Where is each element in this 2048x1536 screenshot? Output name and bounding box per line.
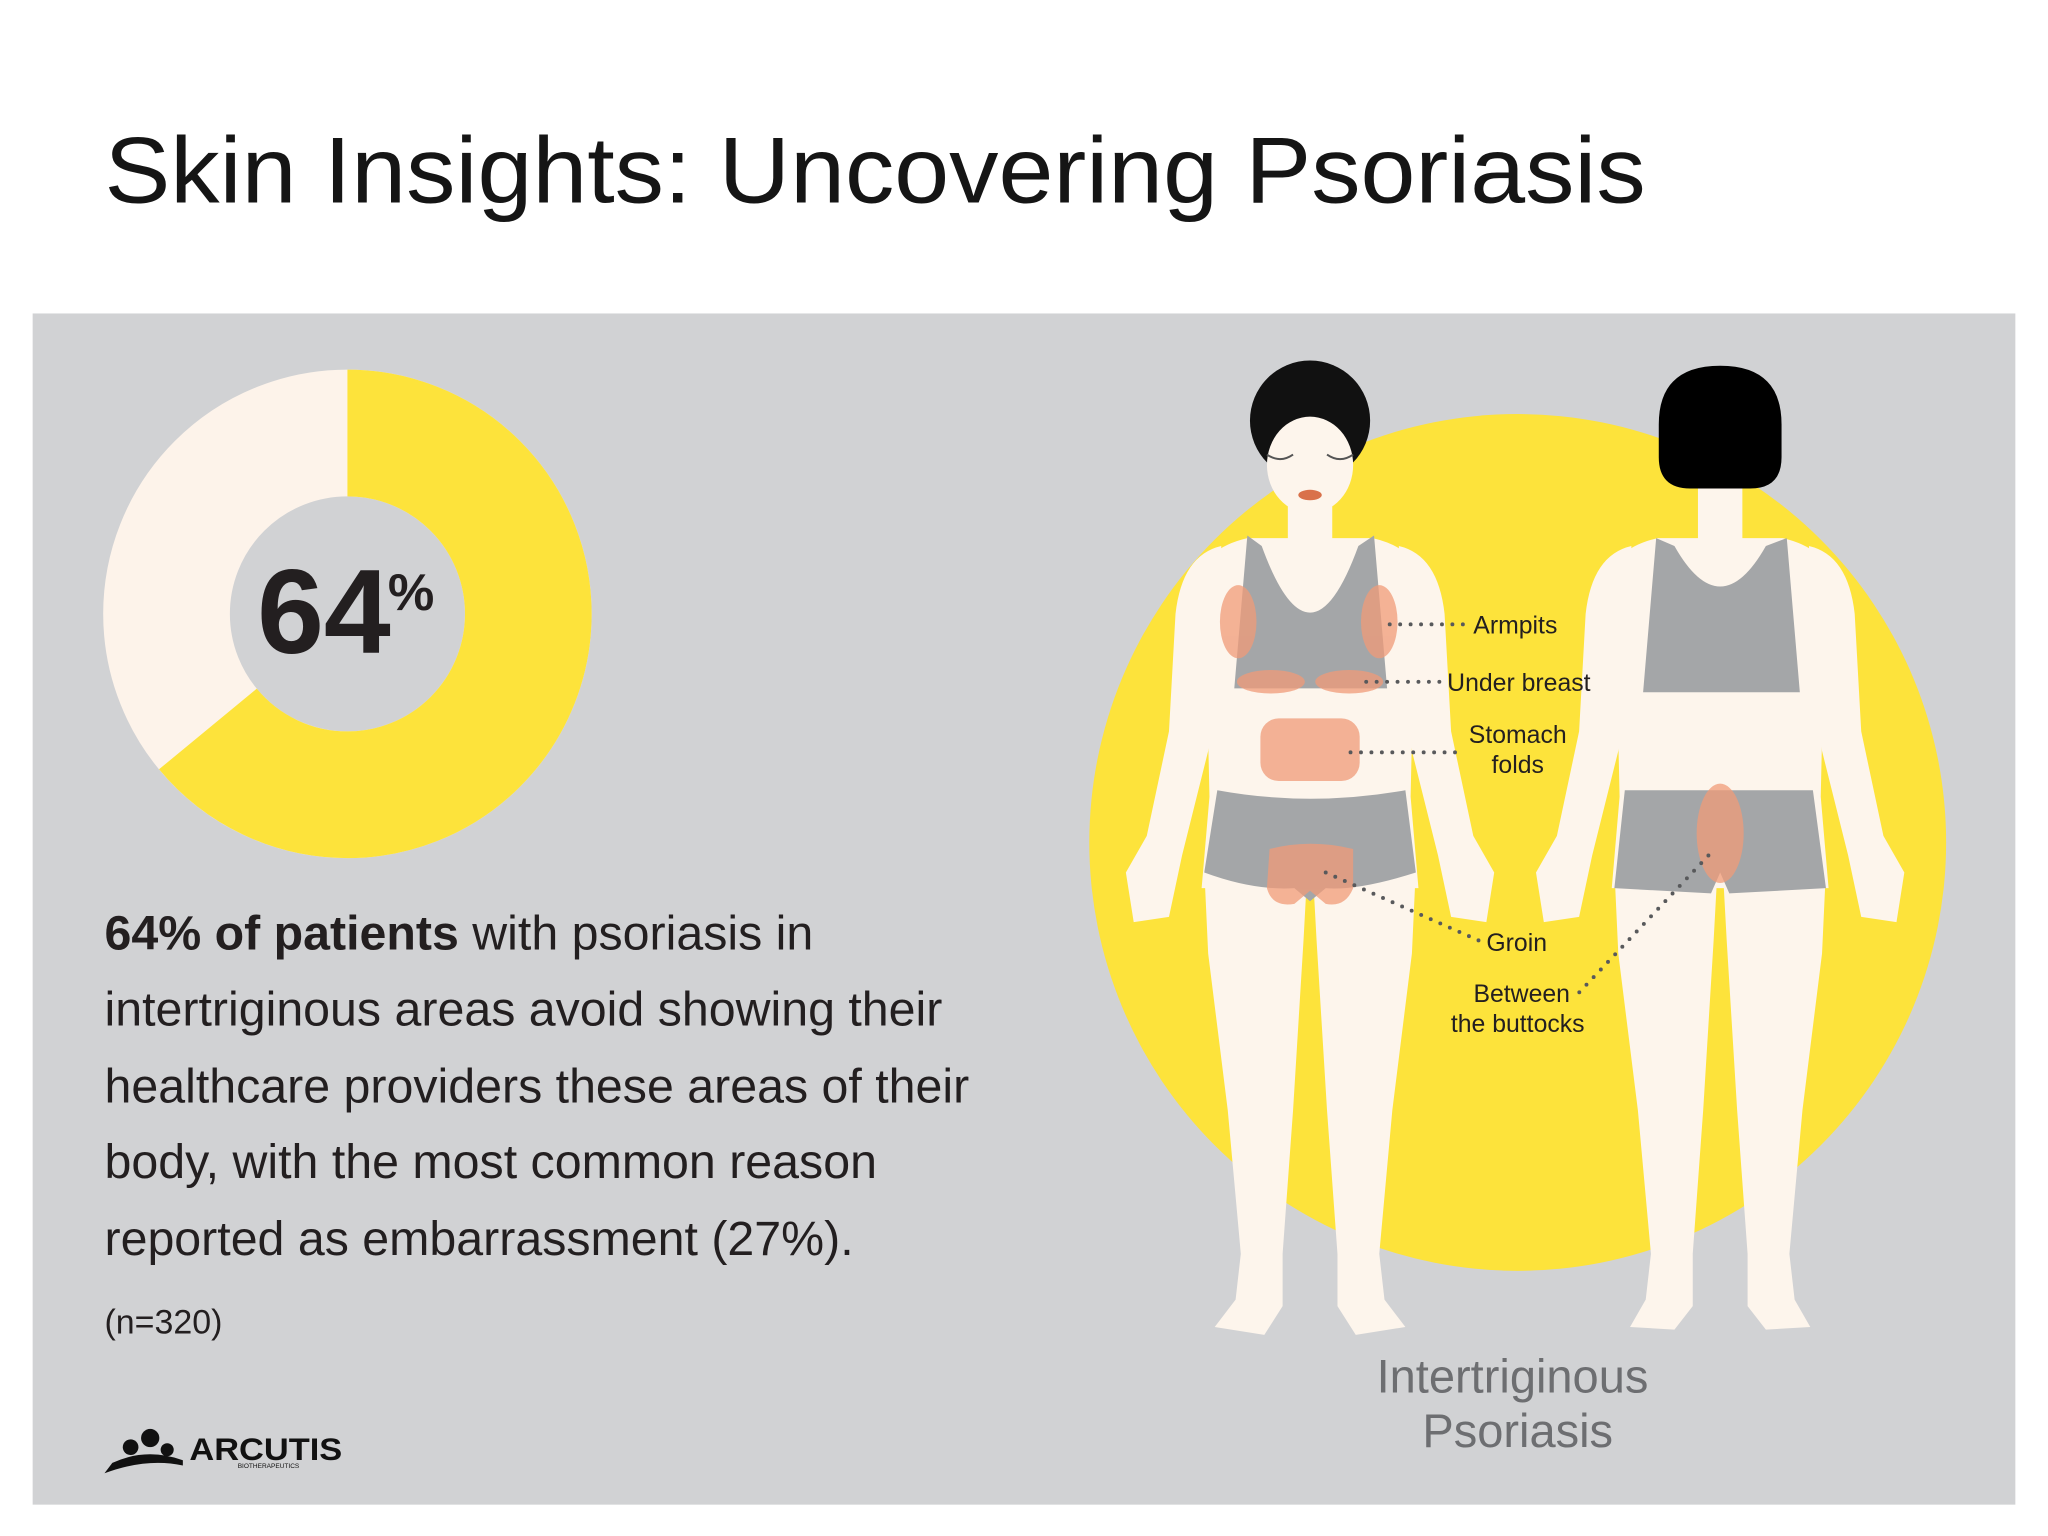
donut chart: 64% [167,433,528,795]
callouts [1326,624,1708,995]
caption: Intertriginous Psoriasis [1377,1349,1648,1457]
labels: folds [1492,752,1544,779]
text block: statistic: body, with the most common reason [104,1135,877,1189]
yellow background circle [1089,414,1946,1271]
labels: the buttocks [1451,1011,1585,1038]
labels: Between [1473,981,1570,1008]
text block: statistic: reported as embarrassment (27%). [104,1212,854,1266]
patches [1220,585,1398,904]
labels: Groin [1486,930,1547,957]
caption: Intertriginous Psoriasis: Intertriginous [1377,1349,1648,1402]
logo: Arcutis [104,1429,342,1473]
donut label: 64 [257,545,391,679]
text block: statistic: intertriginous areas avoid showing their [104,982,942,1036]
figure: front view [1126,360,1494,1335]
logo: Arcutis: BIOTHERAPEUTICS [238,1463,300,1470]
labels [1447,612,1591,1038]
patch: between buttocks [1697,784,1744,883]
panel: gray background [33,313,2015,1505]
text block: statistic: 64% of patients with psoriasis in [104,907,813,961]
title: Skin Insights: Uncovering Psoriasis [104,117,1646,222]
logo: Arcutis: ARCUTIS [189,1432,342,1467]
donut label: % [388,564,434,622]
labels: Stomach [1469,722,1567,749]
text block: statistic: healthcare providers these areas of their [104,1059,969,1113]
text block: statistic [104,907,969,1266]
sample size note: (n=320) [104,1304,222,1342]
figure: back view [1536,366,1904,1330]
caption: Intertriginous Psoriasis: Psoriasis [1422,1404,1613,1457]
labels: Armpits [1473,612,1557,639]
labels: Under breast [1447,670,1591,697]
